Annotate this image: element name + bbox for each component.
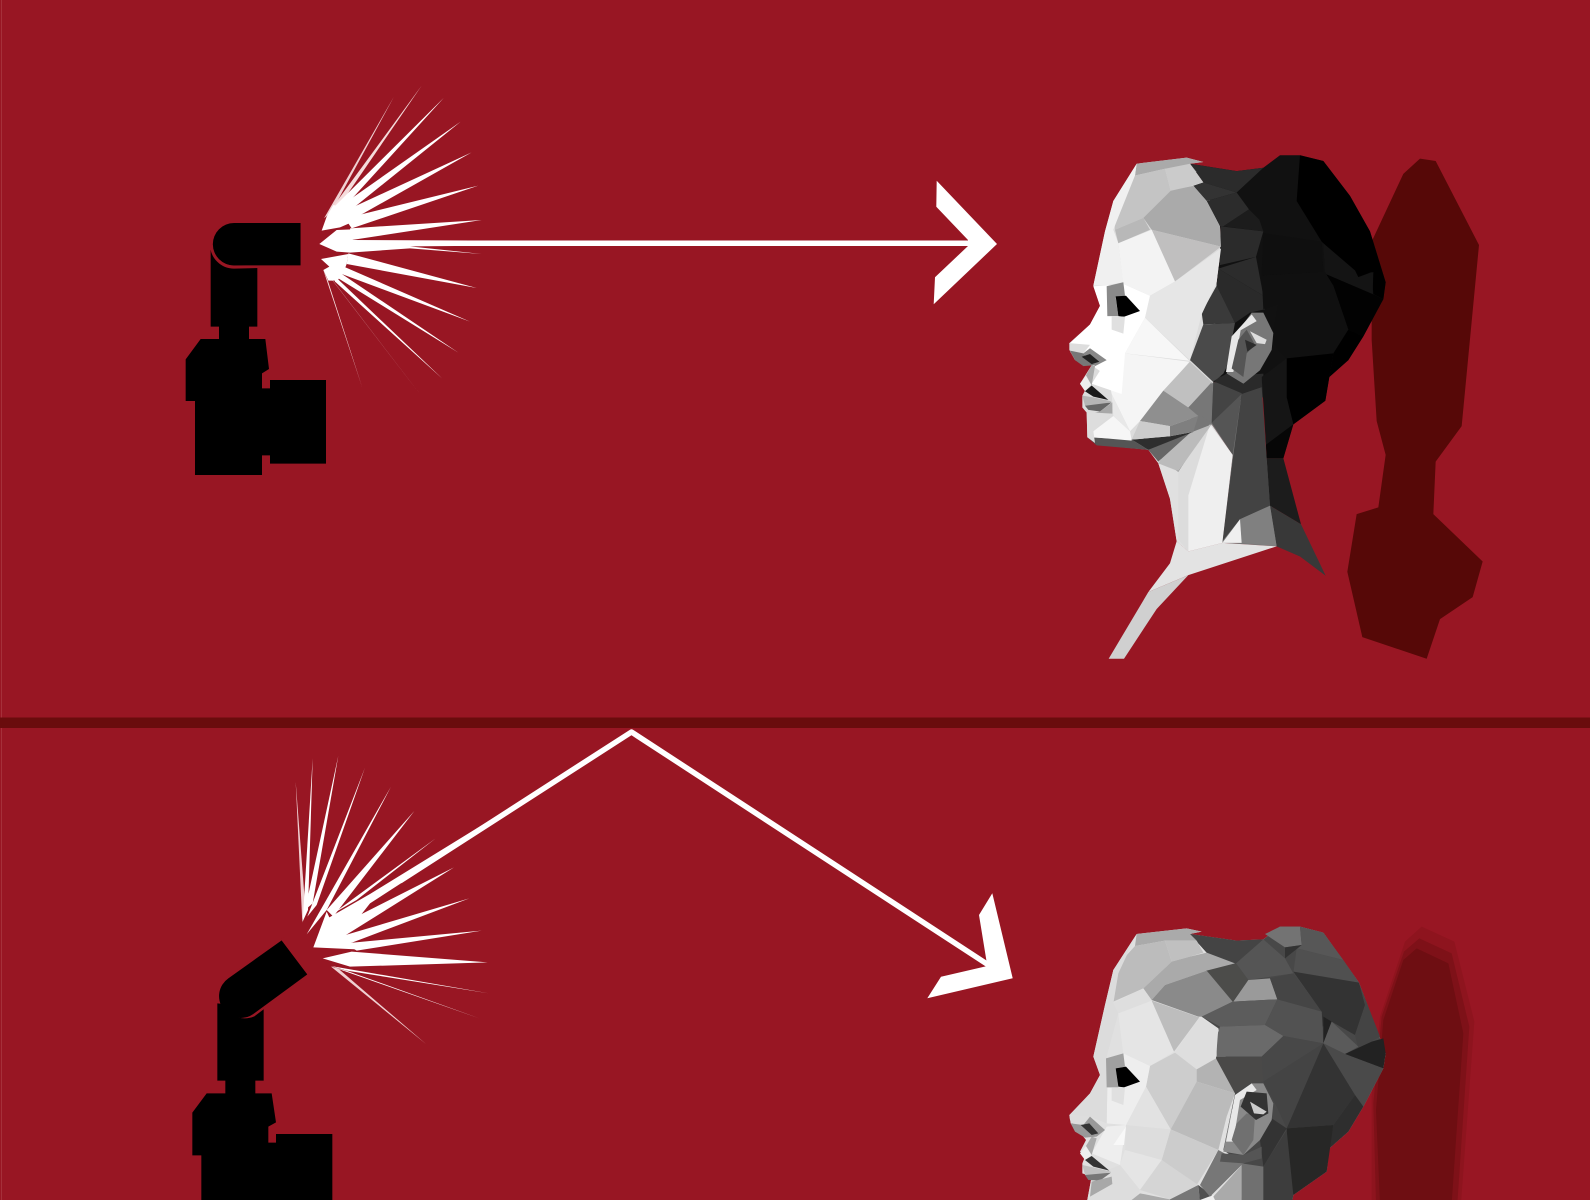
portrait: softly lit low-poly head bbox=[1069, 927, 1386, 1200]
icon: camera with flash tilted upward bbox=[192, 937, 332, 1200]
portrait: harshly lit low-poly head bbox=[1069, 155, 1386, 659]
panel: bounced flash bbox=[192, 732, 1474, 1200]
divider band between panels bbox=[0, 718, 1590, 728]
flash burst: angled bbox=[296, 756, 500, 1044]
face planes bbox=[1070, 928, 1235, 1200]
arrow: straight light path to subject bbox=[380, 181, 997, 304]
neck bbox=[1200, 1150, 1263, 1200]
face planes bbox=[1070, 158, 1221, 450]
lips bbox=[1080, 365, 1112, 414]
flash burst: direct bbox=[319, 86, 500, 395]
arrow: light bouncing off the ceiling to subject bbox=[400, 732, 1013, 998]
lips bbox=[1080, 1137, 1112, 1197]
nose bbox=[1069, 1115, 1105, 1138]
neck and shoulder bbox=[1109, 382, 1326, 659]
icon: camera with forward-facing flash bbox=[186, 220, 326, 475]
eye bbox=[1107, 282, 1140, 334]
ear bbox=[1220, 1083, 1273, 1163]
panel: direct flash bbox=[186, 86, 1483, 659]
eye bbox=[1106, 1053, 1140, 1105]
nose bbox=[1069, 343, 1107, 366]
hair planes bbox=[1190, 927, 1386, 1200]
shadow: hard cast shadow bbox=[1347, 159, 1483, 659]
shadow: soft diffuse shadow bbox=[1372, 927, 1474, 1200]
ear bbox=[1226, 313, 1273, 384]
